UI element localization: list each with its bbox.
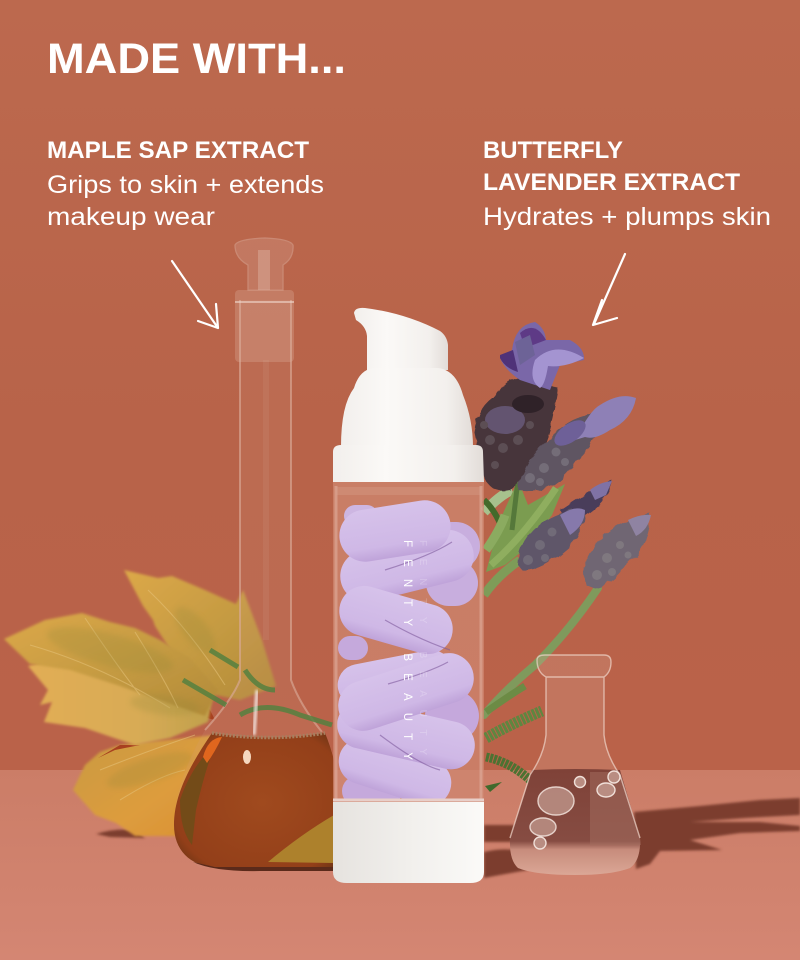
flask: orange reflection — [203, 737, 222, 763]
leaf: upper lobe — [124, 570, 276, 700]
maple leaf — [4, 570, 276, 836]
flask: amber liquid — [174, 733, 334, 867]
callout body: Grips to skin + extends — [47, 171, 324, 199]
erlenmeyer: bubbles — [530, 771, 620, 849]
flask: green sprig inside — [183, 650, 332, 725]
erlenmeyer: water — [510, 769, 640, 875]
flask: liquid reflected leaf — [268, 815, 334, 863]
bottle: barrel highlights — [336, 486, 481, 800]
foundation bottle — [332, 308, 484, 883]
flask: base shadow — [193, 862, 334, 871]
flask: liquid surface foam — [212, 733, 325, 738]
leaf: red underside — [98, 685, 215, 758]
callout heading: MAPLE SAP EXTRACT — [47, 137, 309, 164]
bottle: pump nozzle — [354, 308, 448, 370]
bottle: brand text: FENTY BEAUTY — [401, 540, 413, 760]
leaf: lower lobe — [73, 735, 215, 836]
bottle: white base — [333, 802, 484, 883]
callout heading: BUTTERFLY — [483, 137, 623, 164]
Erlenmeyer flask — [510, 655, 641, 875]
lavender: top flower — [500, 322, 584, 390]
callout: maple sap extract — [47, 137, 324, 231]
leaf: left lobe — [4, 613, 218, 716]
erlenmeyer: glass edges — [510, 655, 640, 838]
foundation bottle: FENTY BEAUTY — [417, 540, 428, 755]
leaf: olive mottling — [43, 601, 222, 795]
lavender: lower right head — [584, 514, 651, 589]
lavender: middle head — [518, 480, 612, 570]
bottle: shoulder dome — [341, 368, 473, 447]
lavender: dark head — [474, 376, 558, 491]
bottle: collar — [333, 445, 484, 482]
title: MADE WITH... — [47, 35, 346, 83]
callout body line two: makeup wear — [47, 203, 215, 231]
lavender sprigs — [474, 322, 651, 792]
leaf: veins — [30, 590, 225, 800]
erlenmeyer: glass body — [510, 655, 640, 875]
lavender: right head — [518, 396, 636, 491]
arrow: to lavender — [593, 254, 625, 325]
cast shadow on table — [96, 798, 800, 878]
maple sap flask — [174, 238, 334, 871]
leaf: lower-left lobe — [28, 650, 212, 745]
flask: highlights — [254, 690, 257, 735]
arrow: to maple flask — [172, 261, 218, 328]
table surface — [0, 770, 800, 960]
bottle: lilac swirl primer — [332, 497, 480, 812]
lavender stems and foliage — [484, 480, 598, 792]
callout: butterfly lavender extract — [483, 137, 771, 231]
bottle: swirl crevices — [380, 542, 452, 770]
flask: stopper — [235, 238, 294, 362]
bottle: clear barrel — [333, 482, 484, 804]
flask: neck glass — [174, 300, 334, 868]
callout body: Hydrates + plumps skin — [483, 203, 771, 231]
callout heading line two: LAVENDER EXTRACT — [483, 169, 740, 196]
